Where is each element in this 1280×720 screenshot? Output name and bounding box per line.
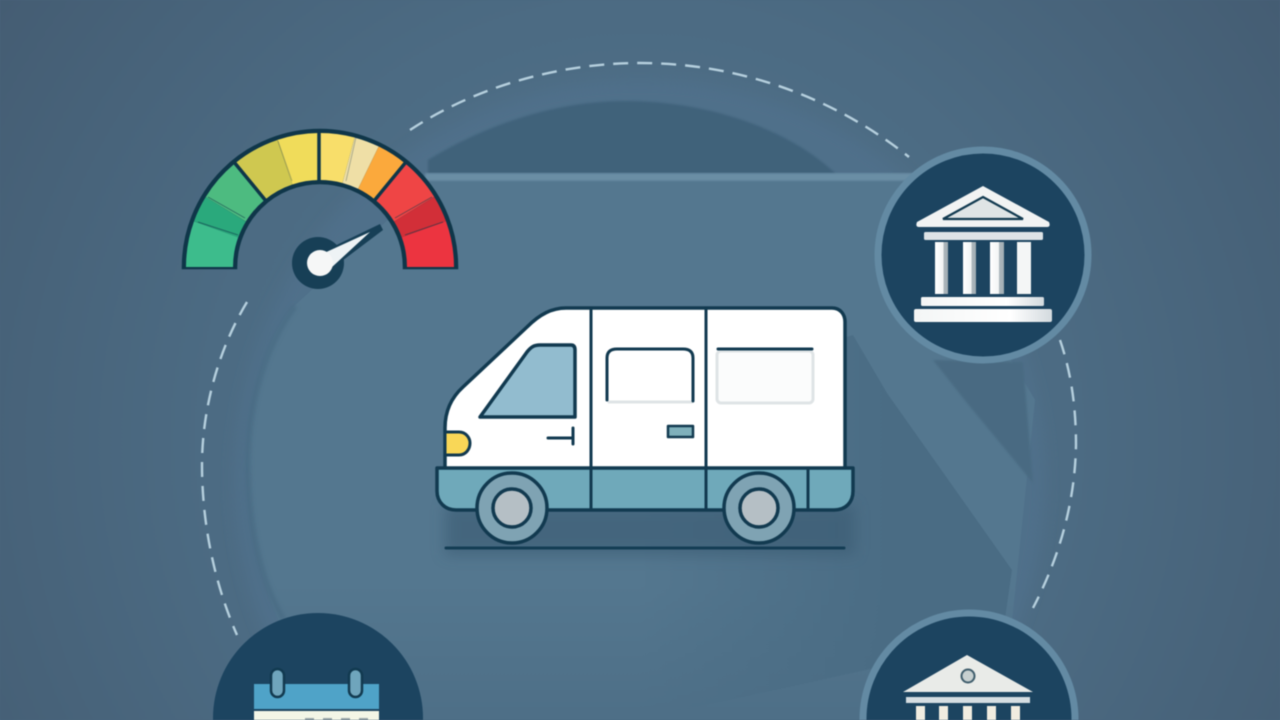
pediment clock	[962, 670, 974, 682]
calendar date marks	[305, 718, 368, 720]
headlight	[445, 432, 470, 455]
skirt dividers	[591, 468, 808, 510]
pediment	[903, 655, 1033, 692]
bank badge top right	[878, 150, 1088, 360]
steps	[921, 297, 1044, 306]
rear window	[717, 349, 813, 403]
backdrop: large circular band and panels	[235, 80, 1045, 720]
bank badge bottom right	[863, 613, 1075, 720]
calendar badge bottom left	[213, 613, 423, 720]
door handle	[548, 428, 573, 444]
van shadow	[445, 505, 855, 555]
ground line	[446, 546, 844, 550]
front window	[480, 345, 575, 417]
entablature	[906, 697, 1030, 703]
dashed orbit arcs	[202, 63, 1076, 635]
van	[437, 308, 853, 548]
van skirt	[437, 468, 853, 510]
columns	[916, 706, 1020, 720]
calendar header	[254, 684, 379, 709]
van body	[445, 308, 845, 469]
sliding door handle	[668, 426, 693, 437]
gauge needle hub	[292, 237, 344, 289]
rear wheel	[724, 473, 794, 543]
columns	[935, 242, 1031, 294]
front wheel	[477, 473, 547, 543]
calendar page	[254, 711, 379, 720]
gauge dividers	[198, 131, 443, 235]
side window	[607, 349, 693, 402]
entablature	[924, 232, 1043, 240]
gauge colored segments	[164, 111, 476, 423]
door dividers	[591, 309, 706, 510]
gauge outline	[184, 131, 456, 267]
gauge	[164, 111, 476, 423]
gauge needle	[320, 224, 383, 270]
pediment	[916, 186, 1050, 227]
calendar binding rings	[271, 669, 362, 697]
